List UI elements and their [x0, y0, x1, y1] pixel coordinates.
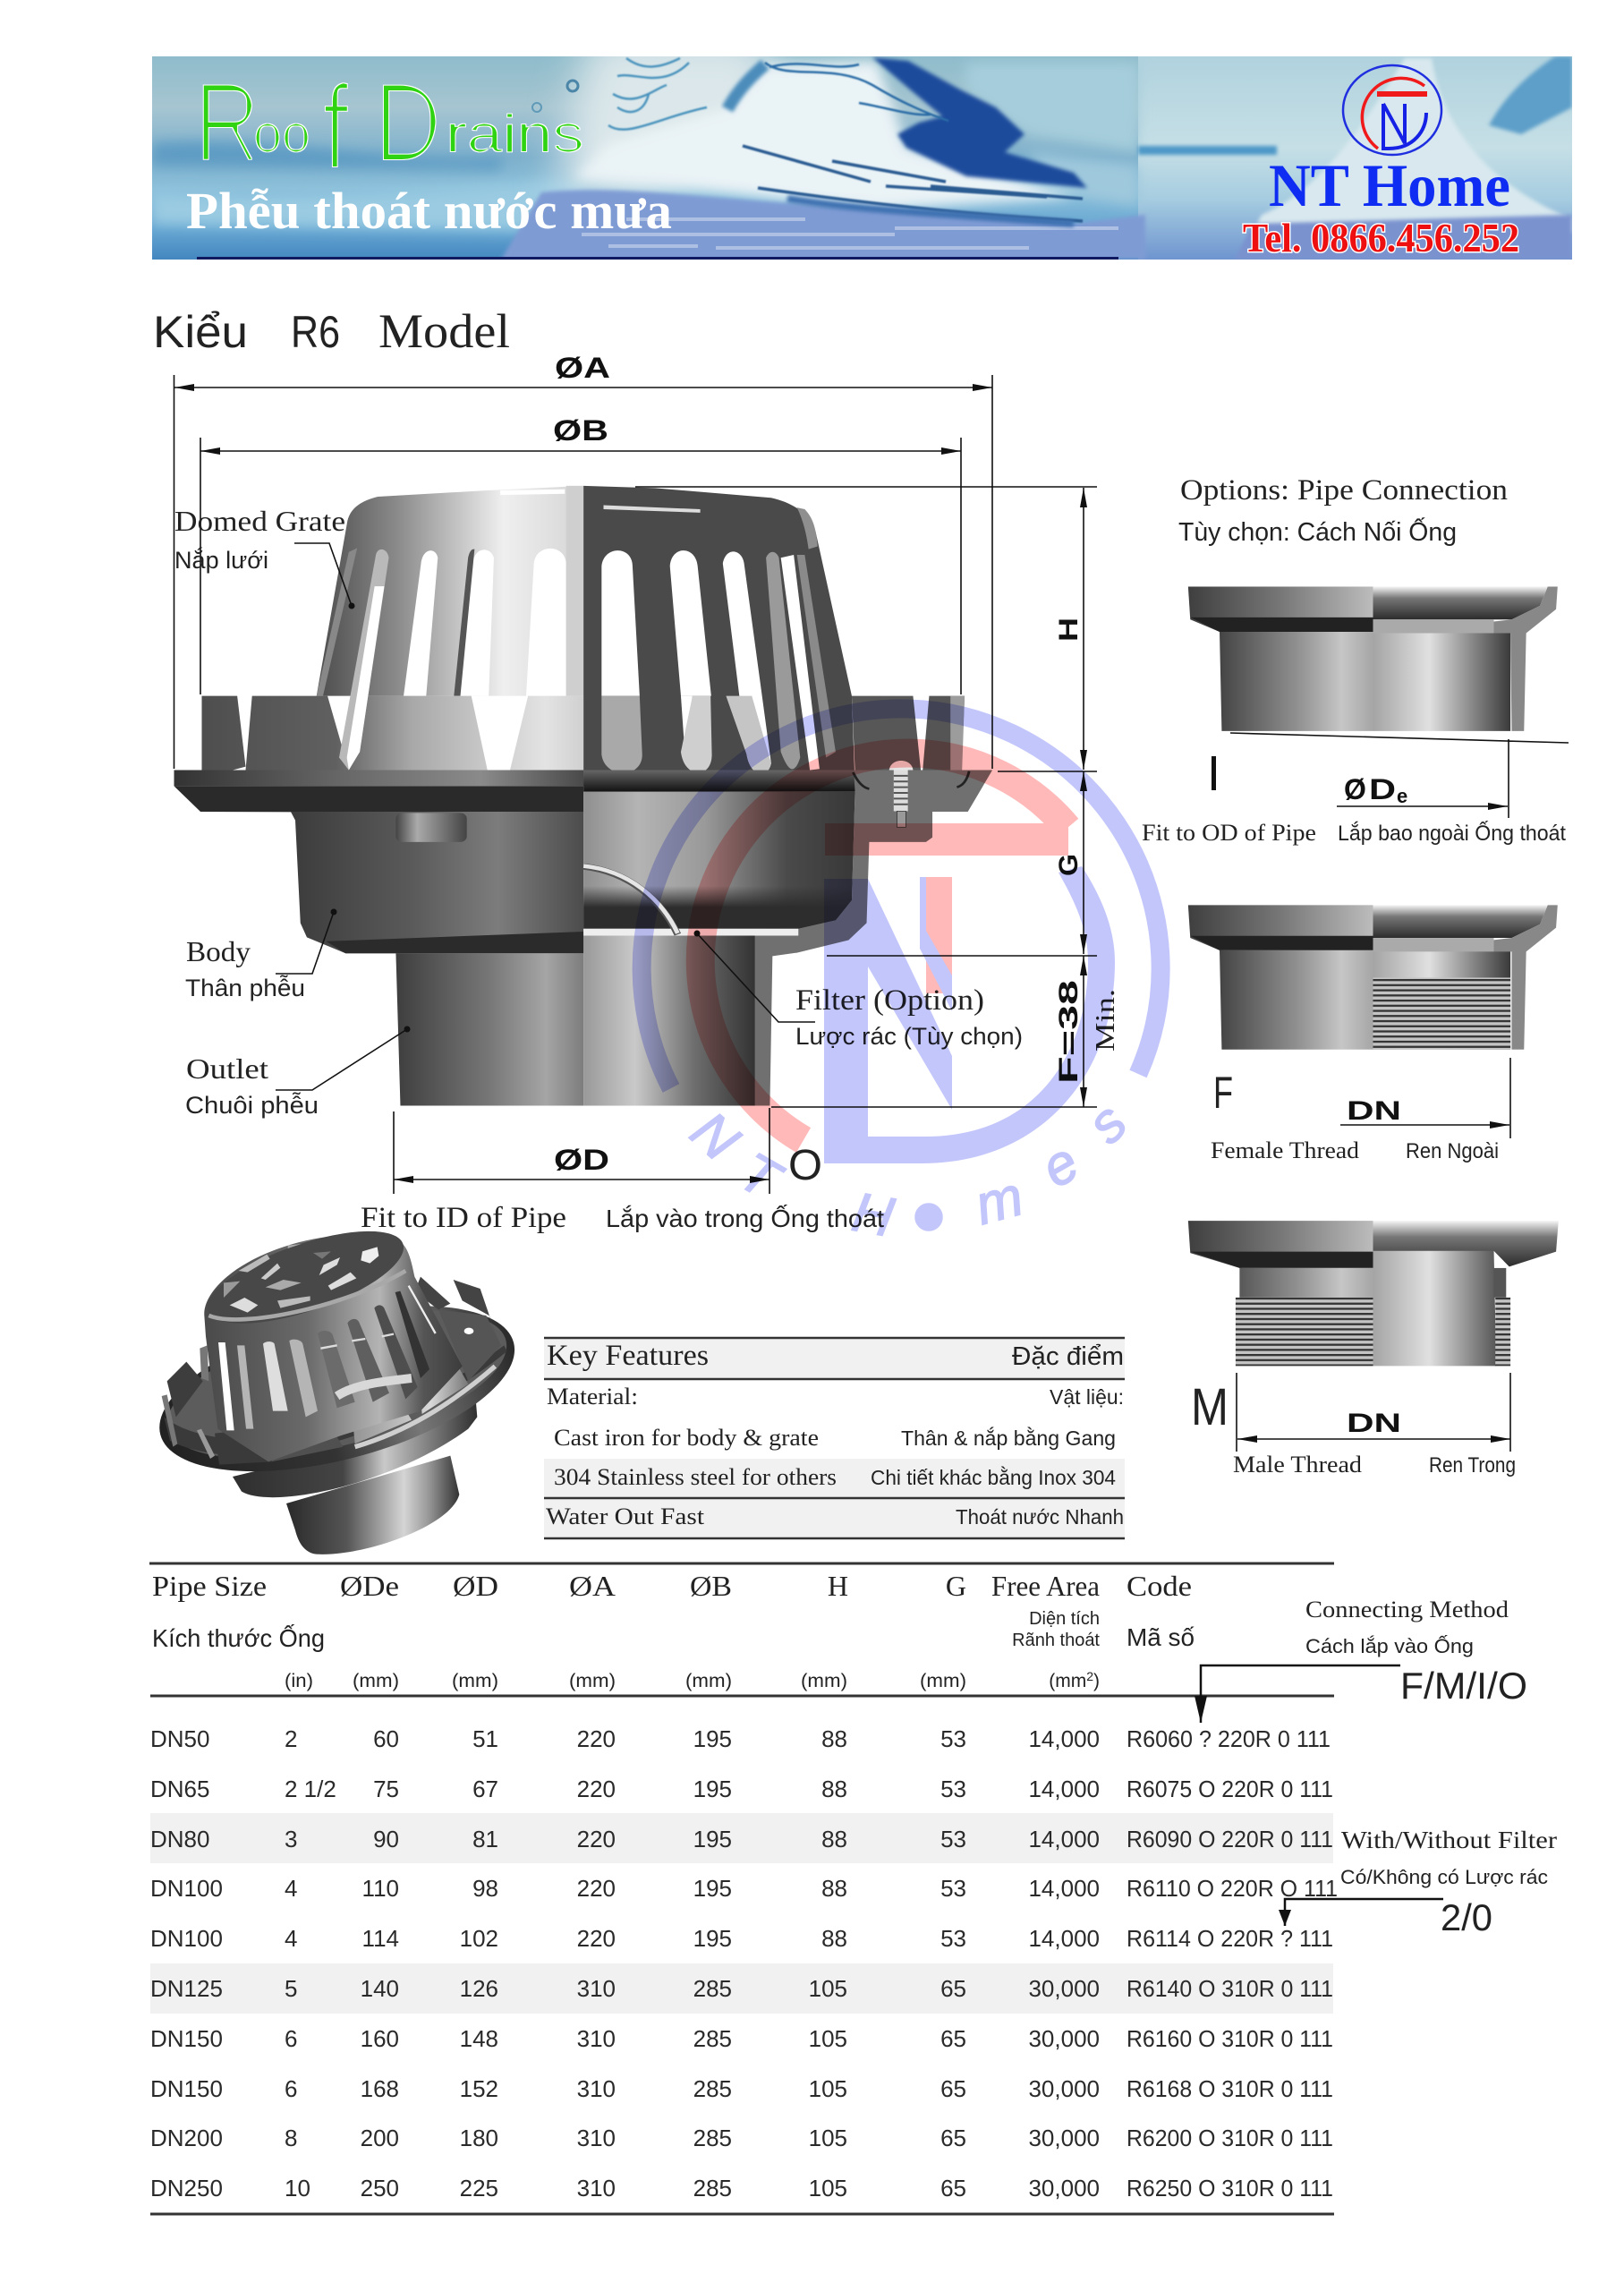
dimension: ØB: ØB: [553, 414, 608, 447]
table row DN250: [150, 2175, 1333, 2202]
table row DN250: DN250: [150, 2175, 223, 2202]
table row DN250: 250: [361, 2175, 399, 2202]
label: outlet: [185, 1026, 410, 1119]
table row DN150 (168): 310: [577, 2075, 616, 2102]
option I: fit to OD of pipe: [1142, 586, 1569, 846]
panel: key features: Đặc điểm: [1012, 1342, 1124, 1371]
option F: female thread: [1188, 905, 1558, 1163]
caption: fit to ID of pipe: Fit to ID of Pipe: [361, 1202, 566, 1234]
table row DN65: 88: [821, 1776, 847, 1802]
table row DN150 (168): 285: [693, 2075, 732, 2102]
table row DN80: 90: [373, 1826, 399, 1852]
dimension: H, G, F: G: [1054, 854, 1084, 876]
table row DN100 (110): 88: [821, 1875, 847, 1902]
label: filter: Filter (Option): [795, 984, 984, 1017]
table row DN100 (110): 4: [285, 1875, 297, 1902]
table row DN100 (114): 53: [940, 1925, 966, 1952]
table row DN50: 51: [472, 1725, 498, 1752]
table row DN200: 65: [940, 2125, 966, 2151]
table header: Free Area: [991, 1570, 1100, 1602]
options heading: Tùy chọn: Cách Nối Ống: [1178, 516, 1457, 547]
table row DN100 (114): [150, 1925, 1333, 1952]
table header: (mm): [801, 1671, 847, 1691]
table row DN80: DN80: [150, 1826, 209, 1852]
table row DN80: [150, 1826, 1333, 1852]
table row DN150 (168): 152: [460, 2075, 498, 2102]
table row DN65: DN65: [150, 1776, 209, 1802]
right half: grate section: [583, 486, 965, 792]
table row DN65: 67: [472, 1776, 498, 1802]
table header: ): [1093, 1671, 1100, 1691]
banner: water splash background: [152, 36, 1572, 260]
table row DN150 (168): 168: [361, 2075, 399, 2102]
table row DN65: 53: [940, 1776, 966, 1802]
table header: (in): [285, 1671, 313, 1691]
table row DN150 (160): 30,000: [1028, 2025, 1100, 2052]
table row DN80: 14,000: [1028, 1826, 1100, 1852]
label: body: Thân phễu: [185, 974, 305, 1001]
table row DN65: R6075 O 220R 0 111: [1127, 1776, 1333, 1802]
callout: connecting method: [1201, 1597, 1527, 1723]
table row DN250: R6250 O 310R 0 111: [1127, 2175, 1333, 2202]
table row DN100 (114): 88: [821, 1925, 847, 1952]
table row DN150 (168): DN150: [150, 2075, 223, 2102]
table row DN150 (160): 160: [361, 2025, 399, 2052]
table header: ØD: [453, 1570, 498, 1602]
watermark: NT Homes logo: [642, 709, 1161, 1249]
label: outlet: Outlet: [186, 1052, 268, 1085]
table row DN250: 65: [940, 2175, 966, 2202]
table header: ØDe: [340, 1570, 399, 1602]
table row DN100 (110): 14,000: [1028, 1875, 1100, 1902]
table row DN150 (168): 30,000: [1028, 2075, 1100, 2102]
table row DN250: 285: [693, 2175, 732, 2202]
table row DN125: 310: [577, 1975, 616, 2002]
callout: connecting method: Cách lắp vào Ống: [1305, 1634, 1474, 1657]
option I: fit to OD of pipe: e: [1397, 785, 1407, 807]
panel: key features: Vật liệu:: [1050, 1385, 1124, 1409]
option M: male thread: Male Thread: [1233, 1452, 1362, 1478]
table row DN125: 105: [809, 1975, 847, 2002]
table header: ØB: [690, 1570, 732, 1602]
option I: fit to OD of pipe: Fit to OD of Pipe: [1142, 820, 1316, 846]
table row DN150 (160): R6160 O 310R 0 111: [1127, 2025, 1333, 2052]
table row DN50: 14,000: [1028, 1725, 1100, 1752]
watermark: NT Homes logo: T: [729, 1141, 792, 1214]
options heading: [1178, 474, 1508, 547]
watermark: NT Homes logo: H: [848, 1181, 898, 1249]
table row DN200: 8: [285, 2125, 297, 2151]
caption: fit to ID of pipe: [361, 1202, 884, 1234]
table row DN80: 220: [577, 1826, 616, 1852]
watermark: NT Homes logo: e: [1032, 1131, 1089, 1200]
watermark: NT Homes logo: N: [679, 1100, 751, 1173]
table row DN150 (168): 105: [809, 2075, 847, 2102]
table row DN65: 2 1/2: [285, 1776, 336, 1802]
options heading: Options: Pipe Connection: [1180, 474, 1508, 507]
table row DN150 (168): 65: [940, 2075, 966, 2102]
screw: [889, 761, 913, 827]
table row DN65: 14,000: [1028, 1776, 1100, 1802]
dimension: ØB: [200, 414, 961, 694]
table header: H: [828, 1570, 848, 1602]
label: domed grate: Domed Grate: [174, 505, 345, 537]
panel: key features: Thoát nước Nhanh: [956, 1505, 1124, 1529]
dimension: ØD: [394, 1108, 769, 1194]
table row DN150 (160): 65: [940, 2025, 966, 2052]
table rules and shaded rows: [149, 1563, 1334, 2214]
telephone number: Tel. 0866.456.252: [1243, 215, 1519, 260]
callout: with or without filter: With/Without Filter: [1341, 1827, 1557, 1853]
table row DN65: 75: [373, 1776, 399, 1802]
label: filter: Lược rác (Tùy chọn): [795, 1023, 1023, 1050]
table row DN65: [150, 1776, 1333, 1802]
table row DN100 (110): [150, 1875, 1338, 1902]
table row DN80: 195: [693, 1826, 732, 1852]
table row DN100 (110): 98: [472, 1875, 498, 1902]
table header: Code: [1127, 1570, 1192, 1602]
table row DN100 (114): 195: [693, 1925, 732, 1952]
panel: key features: Chi tiết khác bằng Inox 304: [871, 1466, 1116, 1489]
option I: fit to OD of pipe: D: [1369, 773, 1396, 805]
table row DN50: 220: [577, 1725, 616, 1752]
table row DN250: 105: [809, 2175, 847, 2202]
table row DN200: DN200: [150, 2125, 223, 2151]
table row DN200: 105: [809, 2125, 847, 2151]
table row DN150 (168): 6: [285, 2075, 297, 2102]
table row DN150 (160): DN150: [150, 2025, 223, 2052]
table row DN250: 310: [577, 2175, 616, 2202]
table row DN200: 310: [577, 2125, 616, 2151]
table header: (mm): [920, 1671, 966, 1691]
table row DN50: 88: [821, 1725, 847, 1752]
table header: Kích thước Ống: [152, 1623, 325, 1652]
table row DN100 (114): 4: [285, 1925, 297, 1952]
table row DN80: 81: [472, 1826, 498, 1852]
heading: model: [153, 304, 510, 358]
table row DN50: 53: [940, 1725, 966, 1752]
table row DN80: R6090 O 220R 0 111: [1127, 1826, 1333, 1852]
table header: (mm): [353, 1671, 399, 1691]
table row DN150 (160): 105: [809, 2025, 847, 2052]
table header: G: [946, 1570, 966, 1602]
table row DN100 (114): 220: [577, 1925, 616, 1952]
option M: male thread: DN: [1347, 1409, 1401, 1438]
table row DN200: 180: [460, 2125, 498, 2151]
table row DN200: [150, 2125, 1333, 2151]
table row DN100 (110): DN100: [150, 1875, 223, 1902]
banner title: Roof Drains: oo: [253, 104, 310, 164]
table row DN150 (168): R6168 O 310R 0 111: [1127, 2075, 1333, 2102]
table row DN150 (160): [150, 2025, 1333, 2052]
option M: male thread: Ren Trong: [1429, 1453, 1516, 1478]
3D view of drain: [142, 1213, 531, 1554]
table row DN125: 5: [285, 1975, 297, 2002]
banner subtitle: Phễu thoát nước mưa: [186, 182, 672, 240]
table header: (mm: [1049, 1671, 1086, 1691]
heading: model: Model: [378, 304, 510, 358]
table row DN100 (114): 14,000: [1028, 1925, 1100, 1952]
table row DN125: [150, 1975, 1333, 2002]
table row DN200: R6200 O 310R 0 111: [1127, 2125, 1333, 2151]
option I: fit to OD of pipe: Ø: [1344, 773, 1366, 805]
dome wall with slots: [204, 1235, 463, 1461]
table row DN100 (110): 220: [577, 1875, 616, 1902]
table header: (mm): [452, 1671, 498, 1691]
table row DN125: DN125: [150, 1975, 223, 2002]
table row DN50: 60: [373, 1725, 399, 1752]
label: domed grate: [174, 505, 354, 609]
table row DN100 (114): 114: [362, 1925, 399, 1952]
table row DN100 (110): 195: [693, 1875, 732, 1902]
table row DN50: DN50: [150, 1725, 209, 1752]
table row DN250: 10: [285, 2175, 310, 2202]
callout: with or without filter: Có/Không có Lược rác: [1340, 1866, 1548, 1888]
table header: ØA: [569, 1570, 616, 1602]
top face with openings: [198, 1213, 414, 1342]
dimension: ØA: ØA: [555, 352, 610, 384]
panel: key features: Water Out Fast: [546, 1503, 705, 1529]
left half: flange and body: [174, 770, 583, 1106]
table row DN100 (110): 110: [362, 1875, 399, 1902]
table row DN65: 220: [577, 1776, 616, 1802]
table row DN50: 195: [693, 1725, 732, 1752]
table row DN250: 225: [460, 2175, 498, 2202]
base fins: [162, 1277, 501, 1465]
table row DN125: 65: [940, 1975, 966, 2002]
label: body: Body: [186, 935, 251, 967]
dark blue wave mass: [872, 57, 1087, 188]
panel: key features: 304 Stainless steel for others: [554, 1464, 837, 1490]
connection type O: O: [788, 1142, 822, 1189]
label: domed grate: Nắp lưới: [174, 546, 268, 574]
banner title: Roof Drains: rains: [446, 104, 584, 164]
table row DN50: R6060 ? 220R 0 111: [1127, 1725, 1331, 1752]
table row DN125: 140: [361, 1975, 399, 2002]
dimension: ØD: ØD: [554, 1144, 609, 1176]
caption: fit to ID of pipe: Lắp vào trong Ống thoát: [606, 1204, 884, 1232]
table row DN150 (168): [150, 2075, 1333, 2102]
table header: 2: [1086, 1669, 1093, 1683]
dimension: H, G, F: [635, 487, 1120, 1107]
table header: [152, 1570, 1195, 1691]
company name: NT Home: [1269, 151, 1510, 219]
option F: female thread: Ren Ngoài: [1406, 1139, 1499, 1163]
table row DN80: 3: [285, 1826, 297, 1852]
banner title: Roof Drains: f: [322, 61, 350, 194]
table header: Rãnh thoát: [1012, 1631, 1100, 1650]
label: filter: [694, 931, 1023, 1050]
table row DN125: 126: [460, 1975, 498, 2002]
table row DN65: 195: [693, 1776, 732, 1802]
table row DN80: 53: [940, 1826, 966, 1852]
panel: key features: Thân & nắp bằng Gang: [901, 1427, 1116, 1450]
label: body: [185, 909, 336, 1001]
option F: female thread: Female Thread: [1211, 1137, 1359, 1163]
table row DN250: 30,000: [1028, 2175, 1100, 2202]
right half: body section and outlet: [583, 770, 992, 1106]
option F: female thread: DN: [1347, 1096, 1401, 1126]
table row DN100 (114): R6114 O 220R ? 111: [1127, 1925, 1333, 1952]
table header: Diện tích: [1029, 1609, 1100, 1629]
panel: key features: Cast iron for body & grate: [554, 1425, 819, 1451]
banner title: Roof Drains: [194, 61, 584, 194]
table row DN150 (160): 310: [577, 2025, 616, 2052]
panel: key features: [544, 1338, 1125, 1538]
callout: with or without filter: 2/0: [1441, 1896, 1492, 1938]
watermark: NT Homes logo: s: [1076, 1092, 1139, 1155]
logo: NT Home emblem: [1343, 65, 1441, 155]
watermark: NT Homes logo: m: [969, 1165, 1030, 1237]
table row DN125: R6140 O 310R 0 111: [1127, 1975, 1333, 2002]
table row DN150 (160): 148: [460, 2025, 498, 2052]
table row DN150 (160): 285: [693, 2025, 732, 2052]
option I: fit to OD of pipe: Lắp bao ngoài Ống thoát: [1338, 821, 1566, 846]
banner title: Roof Drains: R: [194, 61, 260, 185]
dimension: H, G, F: H: [1054, 617, 1084, 642]
table row DN100 (110): R6110 O 220R O 111: [1127, 1875, 1338, 1902]
table row DN200: 285: [693, 2125, 732, 2151]
heading: model: Kiểu: [153, 307, 248, 357]
dimension: H, G, F: Min.: [1089, 989, 1120, 1052]
callout: connecting method: Connecting Method: [1305, 1597, 1509, 1622]
table header: Pipe Size: [152, 1570, 267, 1602]
left half: domed grate: [201, 486, 583, 770]
panel: key features: Key Features: [547, 1340, 709, 1372]
table row DN125: 30,000: [1028, 1975, 1100, 2002]
panel: key features: Material:: [547, 1384, 638, 1410]
table row DN100 (114): DN100: [150, 1925, 223, 1952]
table row DN100 (114): 102: [460, 1925, 498, 1952]
option M: male thread: [1188, 1221, 1559, 1478]
table row DN200: 200: [361, 2125, 399, 2151]
option M: male thread: M: [1191, 1378, 1229, 1436]
table row DN125: 285: [693, 1975, 732, 2002]
main drain cross-section drawing: [174, 486, 992, 1106]
table header: Mã số: [1127, 1623, 1195, 1651]
table header: (mm): [569, 1671, 616, 1691]
table row DN100 (110): 53: [940, 1875, 966, 1902]
option F: female thread: F: [1213, 1068, 1233, 1118]
label: outlet: Chuôi phễu: [185, 1091, 319, 1119]
table row DN200: 30,000: [1028, 2125, 1100, 2151]
heading: model: R6: [291, 307, 340, 357]
table row DN80: 88: [821, 1826, 847, 1852]
table row DN50: 2: [285, 1725, 297, 1752]
banner title: Roof Drains: D: [374, 61, 442, 185]
table row DN50: [150, 1725, 1331, 1752]
table header: (mm): [685, 1671, 732, 1691]
table row DN150 (160): 6: [285, 2025, 297, 2052]
dimension: ØA: [174, 352, 992, 769]
callout: with or without filter: [1279, 1827, 1557, 1938]
dimension: H, G, F: F=38: [1054, 980, 1084, 1084]
callout: connecting method: F/M/I/O: [1400, 1665, 1527, 1707]
